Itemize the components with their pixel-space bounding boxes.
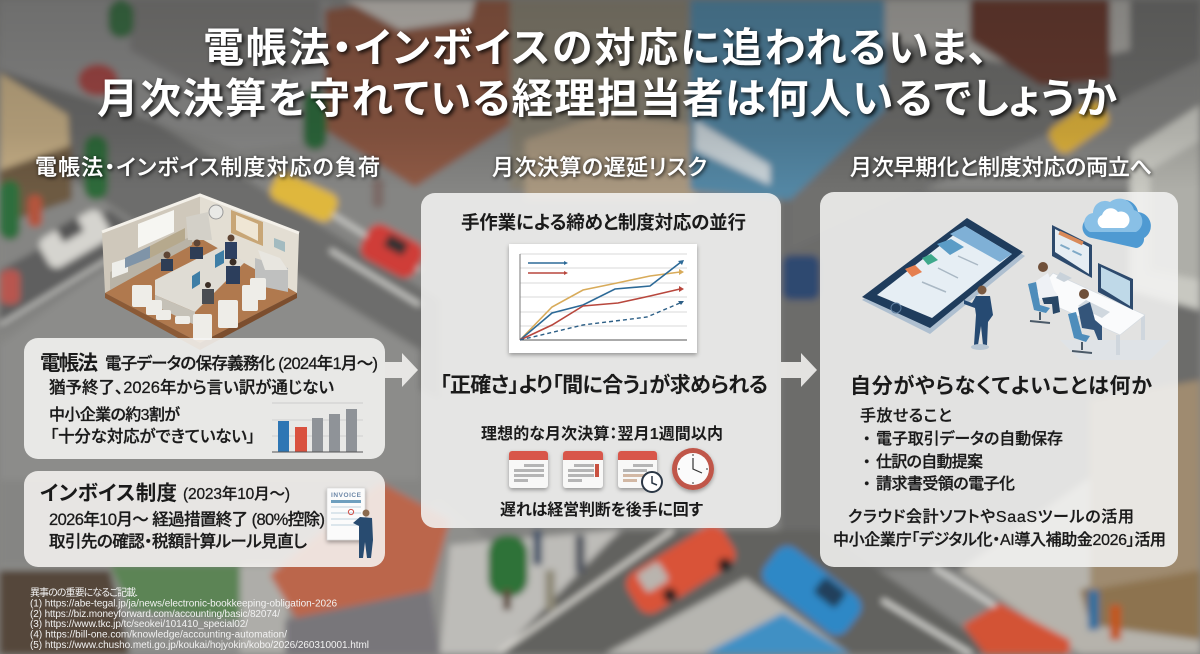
illustration: workers at desks with cloud <box>1028 199 1170 360</box>
illustration: smartphone with person <box>862 218 1025 350</box>
list: tasks you can let go: 仕訳の自動提案 <box>876 453 983 471</box>
icon: invoice document with person <box>327 488 373 558</box>
panel: invoice system <box>24 471 385 567</box>
invoice text <box>49 510 325 551</box>
right panel heading: 自分がやらなくてよいことは何か <box>850 374 1152 398</box>
invoice heading <box>40 482 290 505</box>
closing text: tools and subsidy: クラウド会計ソフトやSaaSツールの活用 <box>848 508 1134 526</box>
closing statement: 遅れは経営判断を後手に回す <box>500 500 703 519</box>
panel heading: 手作業による締めと制度対応の並行 <box>461 212 746 233</box>
footer: sources: 異事のの重要になるご記載. <box>30 586 138 599</box>
law text: 猶予終了、2026年から言い訳が通じない <box>49 377 334 397</box>
arrow: left to center <box>385 353 418 387</box>
footer: sources <box>30 586 369 651</box>
icon: calendar with clock <box>618 451 662 492</box>
closing text: tools and subsidy <box>833 508 1166 549</box>
illustration: isometric office <box>102 195 299 350</box>
law statistic text <box>49 405 255 446</box>
line chart <box>509 244 697 353</box>
office workers <box>161 234 240 304</box>
list: tasks you can let go: ・ <box>859 431 875 448</box>
footer: sources: (1) https://abe-tegal.jp/ja/news/electronic-bookkeeping-obligation-2026 <box>30 598 337 610</box>
arrow: center to right <box>781 353 817 387</box>
icons: calendars <box>509 451 662 492</box>
closing text: tools and subsidy: 中小企業庁「デジタル化・AI導入補助金2026」活用 <box>833 530 1166 549</box>
icon: calendar one <box>509 451 548 488</box>
icon: standing person <box>964 286 993 350</box>
paper stacks <box>132 278 266 340</box>
footer: sources: (5) https://www.chusho.meti.go.jp/koukai/hojyokin/kobo/2026/260310001.html <box>30 640 369 651</box>
list: tasks you can let go: ・ <box>859 476 875 493</box>
bar chart <box>272 403 363 452</box>
law heading <box>40 352 378 375</box>
law statistic text: 「十分な対応ができていない」 <box>50 426 255 446</box>
invoice heading: (2023年10月～) <box>183 485 290 503</box>
icon: invoice document with person: INVOICE <box>331 492 362 499</box>
law heading: 電帳法 <box>40 352 98 375</box>
list: tasks you can let go: 電子取引データの自動保存 <box>876 429 1063 448</box>
footer: sources: (3) https://www.tkc.jp/tc/seokei/101410_special02/ <box>30 619 248 630</box>
invoice text: 取引先の確認・税額計算ルール見直し <box>49 532 307 551</box>
heading: right column: 月次早期化と制度対応の両立へ <box>850 155 1152 180</box>
list: tasks you can let go <box>859 407 1063 493</box>
key message: 「正確さ」より「間に合う」が求められる <box>440 373 768 397</box>
heading: center column: 月次決算の遅延リスク <box>492 155 707 180</box>
icon: cloud <box>1082 199 1151 248</box>
icon: wall clock <box>672 448 714 490</box>
title: 電帳法・インボイスの対応に追われるいま、 <box>203 25 988 71</box>
invoice text: 2026年10月～ 経過措置終了 (80%控除) <box>49 510 325 529</box>
icon: calendar two <box>563 451 603 488</box>
office window and shelf <box>110 210 192 290</box>
ideal closing target: 理想的な月次決算：翌月1週間以内 <box>481 424 723 443</box>
panel: electronic bookkeeping law <box>24 338 385 459</box>
footer: sources: (4) https://bill-one.com/knowledge/accounting-automation/ <box>30 630 287 640</box>
list: tasks you can let go: 請求書受領の電子化 <box>876 474 1015 493</box>
title <box>97 25 1117 122</box>
panel: monthly closing delay risk <box>421 193 781 528</box>
title: 月次決算を守れている経理担当者は何人いるでしょうか <box>97 75 1117 122</box>
invoice heading: インボイス制度 <box>40 482 177 505</box>
list: tasks you can let go: ・ <box>859 454 875 471</box>
law heading: 電子データの保存義務化 (2024年1月～) <box>105 353 378 373</box>
footer: sources: (2) https://biz.moneyforward.com/accounting/basic/82074/ <box>30 609 280 620</box>
heading: left column: 電帳法・インボイス制度対応の負荷 <box>35 155 380 180</box>
panel: balancing early closing and compliance <box>820 192 1178 567</box>
list: tasks you can let go: 手放せること <box>860 407 952 425</box>
law statistic text: 中小企業の約3割が <box>49 405 180 424</box>
